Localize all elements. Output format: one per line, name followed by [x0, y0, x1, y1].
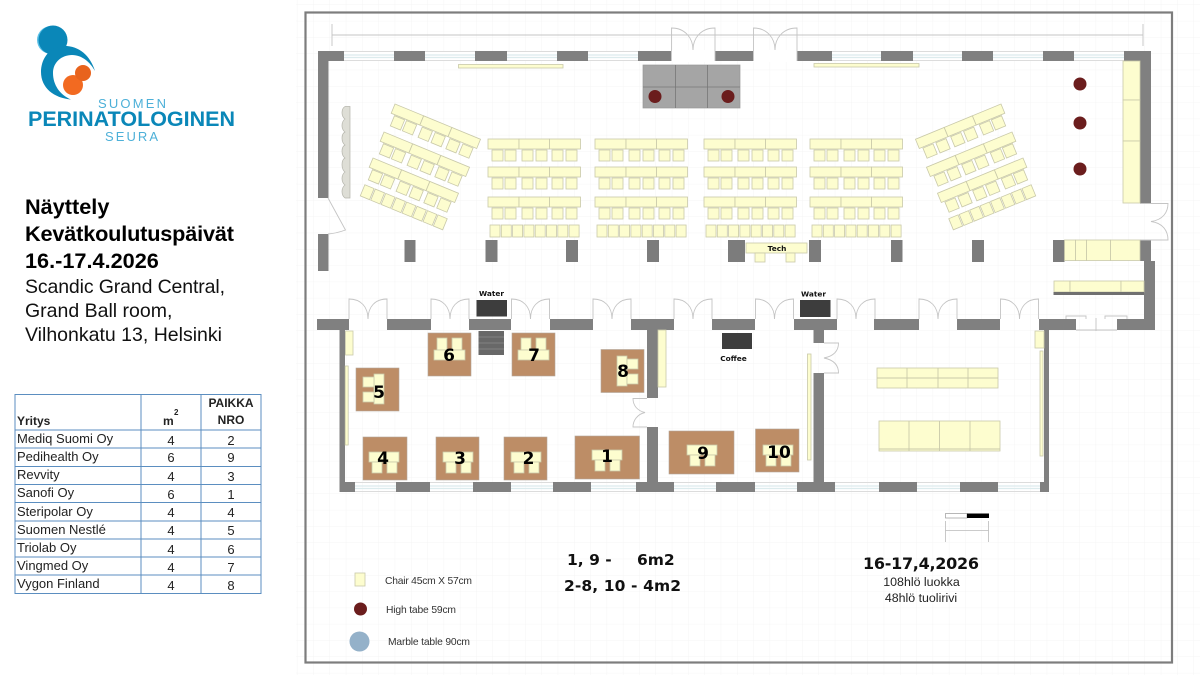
- doors: top entrance: [672, 28, 797, 61]
- door: right side: [1140, 204, 1168, 240]
- booth 4: [363, 437, 407, 480]
- table rows: Vingmed Oy: [17, 558, 89, 573]
- table rows: 4: [227, 505, 235, 520]
- doors: hall to lower rooms: [349, 299, 1038, 319]
- table rows: 7: [227, 560, 235, 575]
- door: wall between rooms right: [824, 343, 838, 373]
- booth size note: 1, 9 -: [567, 551, 612, 569]
- table header: [17, 396, 254, 428]
- title line: Kevätkoulutuspäivät: Kevätkoulutuspäivät: [25, 221, 234, 246]
- legend: [350, 573, 472, 652]
- table rows: [17, 431, 235, 593]
- door: left side: [328, 198, 346, 234]
- booth 2: [504, 437, 547, 480]
- icon: mother and child: [37, 26, 95, 100]
- table rows: 4: [167, 542, 175, 557]
- door: wall between rooms left: [633, 398, 647, 427]
- booth 10: 10: [767, 443, 791, 463]
- table rows: 6: [227, 542, 235, 557]
- table rows: 4: [167, 469, 175, 484]
- booth 3: 3: [454, 449, 466, 469]
- tables: right room upper: [877, 368, 998, 388]
- table rows: 2: [227, 433, 235, 448]
- table header: Yritys: [17, 414, 51, 428]
- table rows: Pedihealth Oy: [17, 449, 99, 464]
- seating: block 1: [488, 139, 580, 237]
- seating: block 3: [704, 139, 796, 237]
- water station 2: [800, 290, 830, 317]
- logo text: Seura: SEURA: [105, 129, 158, 144]
- tables: right room lower: [879, 421, 1000, 451]
- table header: m: [163, 414, 174, 428]
- capacity lines: 48hlö tuolirivi: [885, 591, 957, 605]
- stacked seats left: [342, 106, 350, 198]
- high tables on stage: [648, 90, 734, 103]
- heading: event title and venue: [25, 194, 234, 346]
- legend: chair: Chair 45cm X 57cm: [385, 576, 472, 587]
- capacity note: [863, 554, 979, 605]
- stage: [643, 65, 740, 108]
- pillars: [404, 240, 1064, 262]
- long tables top: [458, 64, 919, 68]
- legend: marble table: Marble table 90cm: [388, 637, 470, 648]
- logo text: Perinatologinen: PERINATOLOGINEN: [28, 107, 235, 131]
- table header: 2: [174, 408, 179, 417]
- booth 9: 9: [697, 444, 709, 464]
- table rows: 4: [167, 433, 175, 448]
- right tables: [1123, 61, 1140, 203]
- booth 8: [601, 350, 644, 392]
- tech table: [746, 243, 807, 262]
- seating: block 4: [810, 139, 902, 237]
- booth 8: 8: [617, 362, 629, 382]
- table rows: Revvity: [17, 467, 60, 482]
- table rows: Triolab Oy: [17, 540, 77, 555]
- room furniture: [345, 330, 1044, 460]
- table rows: 8: [227, 578, 235, 593]
- seating: right angled classroom rows: [915, 104, 1036, 230]
- booth size note: 6m2: [637, 551, 675, 569]
- dimension line: [332, 24, 1143, 46]
- venue text: Scandic Grand Central,: [25, 276, 225, 298]
- table rows: 3: [227, 469, 235, 484]
- booth 10: [756, 429, 799, 472]
- venue text: Vilhonkatu 13, Helsinki: [25, 324, 222, 346]
- booth 9: [669, 431, 734, 474]
- venue text: [25, 276, 225, 346]
- seating: block 2: [595, 139, 688, 237]
- booth 7: 7: [528, 346, 540, 366]
- door: lower right double door: [1066, 316, 1127, 331]
- booth 7: [512, 333, 555, 376]
- lower right wall strip: [1054, 292, 1144, 295]
- booth size note: [564, 551, 681, 595]
- tech table: Tech: [768, 244, 786, 253]
- table rows: Suomen Nestlé: [17, 522, 106, 537]
- booth 4: 4: [377, 449, 389, 469]
- title line: Näyttely: Näyttely: [25, 194, 109, 219]
- booth 6: 6: [443, 346, 455, 366]
- title line: date: 16.-17.4.2026: [25, 248, 159, 273]
- table rows: 4: [167, 560, 175, 575]
- table rows: Steripolar Oy: [17, 504, 93, 519]
- table rows: 4: [167, 505, 175, 520]
- booth 2: 2: [523, 449, 534, 469]
- logo text: Suomen: SUOMEN: [98, 96, 166, 111]
- booth 5: [356, 368, 399, 411]
- booth 6: [428, 333, 471, 376]
- walls: lower rooms bottom: [340, 482, 1049, 492]
- panel: floor plan: [306, 12, 1172, 662]
- capacity lines: 108hlö luokka: [883, 575, 960, 589]
- table rows: 4: [167, 523, 175, 538]
- booth 1: 1: [601, 447, 613, 467]
- stairs: [478, 331, 504, 355]
- walls: main hall: [317, 51, 1155, 492]
- venue text: Grand Ball room,: [25, 300, 172, 322]
- table rows: Vygon Finland: [17, 576, 100, 591]
- capacity lines: [883, 575, 960, 605]
- capacity date: 16-17,4,2026: [863, 554, 979, 573]
- logo: Suomen Perinatologinen Seura: [28, 26, 235, 144]
- table rows: Mediq Suomi Oy: [17, 431, 114, 446]
- water station 1: Water: [479, 289, 504, 298]
- table rows: 6: [167, 487, 175, 502]
- table: exhibitors: [15, 394, 261, 594]
- table rows: 6: [167, 450, 175, 465]
- table rows: 9: [227, 450, 235, 465]
- table header: PAIKKA: [208, 396, 254, 410]
- legend: high table: High tabe 59cm: [386, 605, 456, 616]
- table header: NRO: [218, 413, 244, 427]
- water station 1: [476, 289, 507, 316]
- water station 2: Water: [801, 290, 826, 298]
- window strip: lower rooms: [345, 482, 1049, 492]
- booth 5: 5: [373, 383, 385, 403]
- coffee station: [720, 333, 752, 363]
- coffee station: Coffee: [720, 354, 747, 363]
- lower right tables: [1054, 240, 1144, 292]
- seating: left angled classroom rows: [360, 104, 481, 230]
- high tables: [1074, 78, 1086, 176]
- top window strip: [318, 50, 1151, 62]
- table rows: 4: [167, 578, 175, 593]
- booth 3: [436, 437, 479, 480]
- table rows: Sanofi Oy: [17, 485, 75, 500]
- booth size note: 2-8, 10 - 4m2: [564, 577, 681, 595]
- booth 1: [575, 436, 640, 479]
- table rows: 1: [227, 487, 235, 502]
- table rows: 5: [227, 523, 235, 538]
- scale bar: [946, 514, 989, 542]
